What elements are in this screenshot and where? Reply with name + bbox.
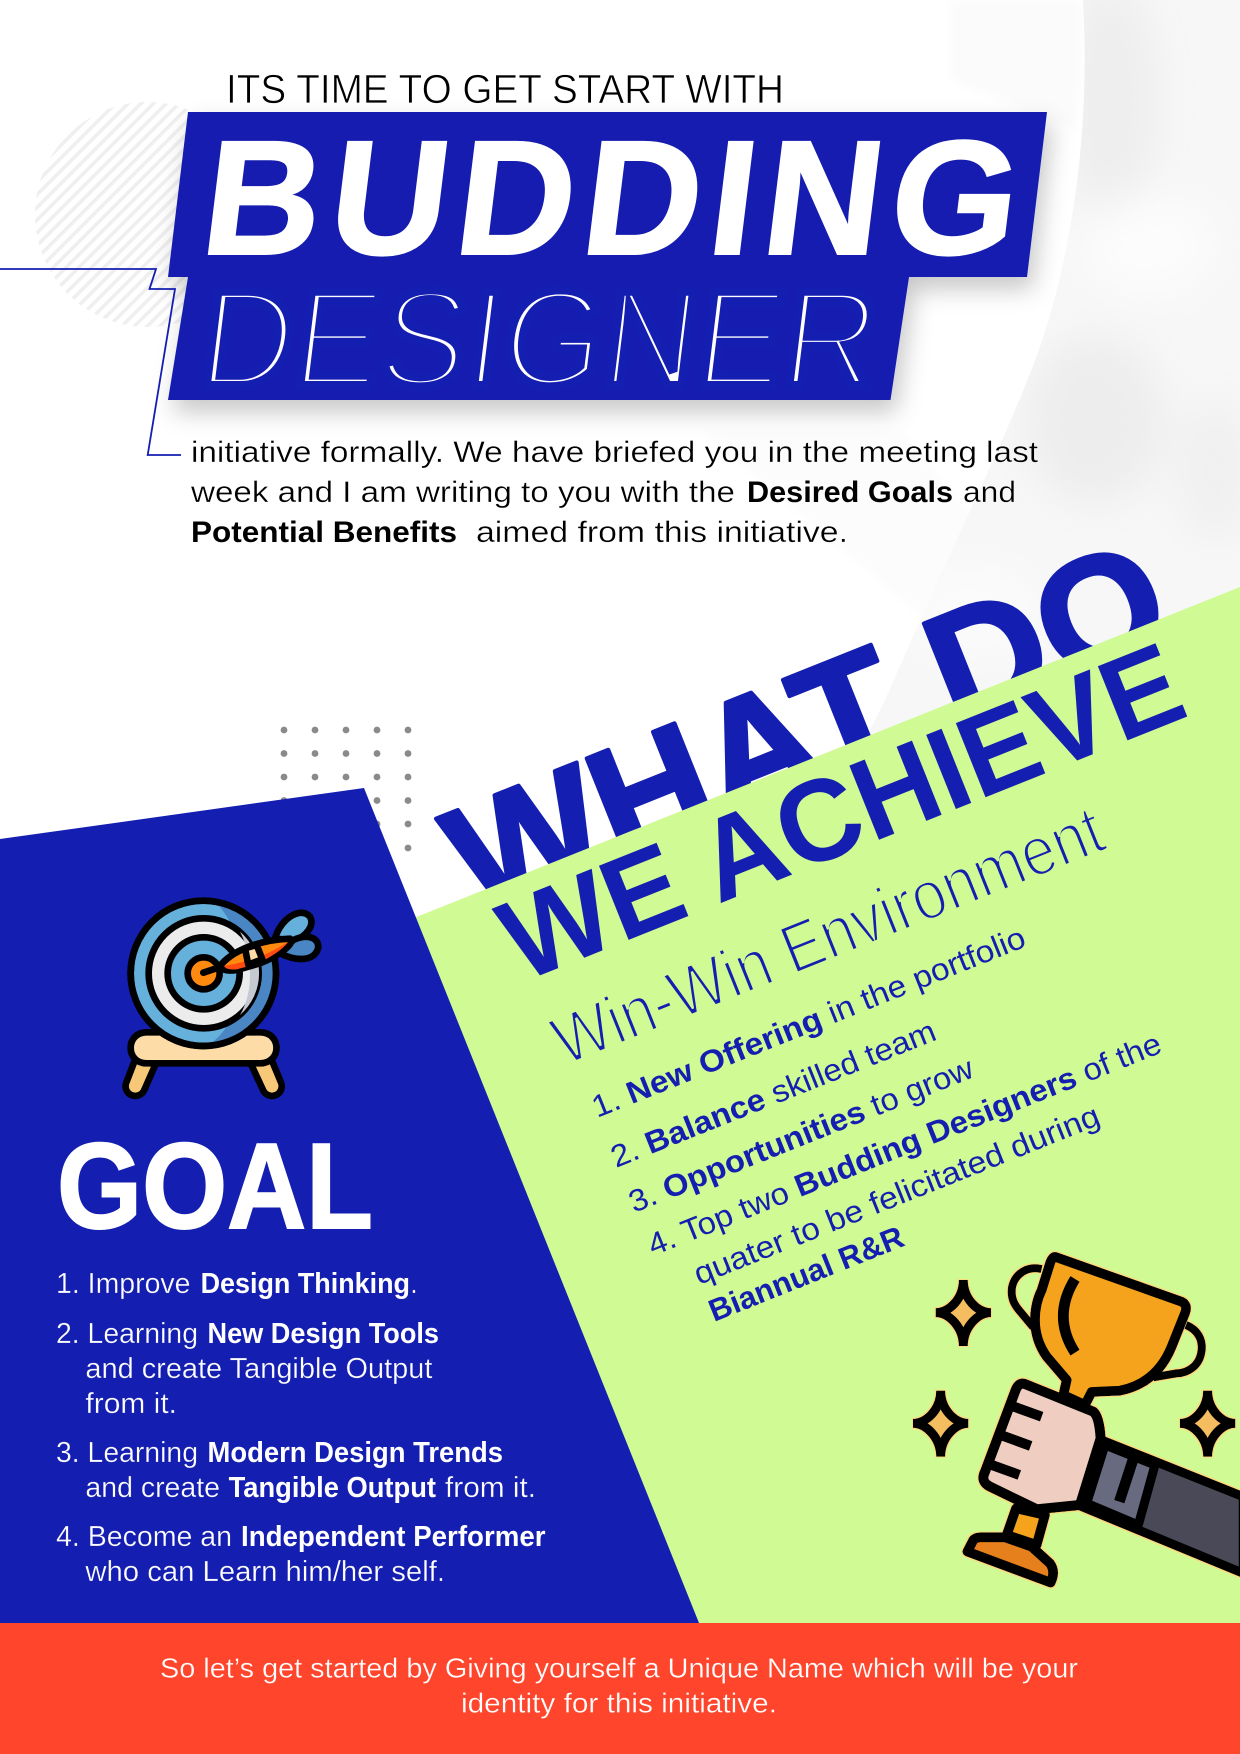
board: [131, 901, 276, 1046]
intro paragraph: Desired Goals: [747, 476, 953, 509]
icon: trophy in hand: [913, 1257, 1240, 1583]
intro paragraph: [190, 436, 1039, 549]
eyebrow heading: ITS TIME TO GET START WITH: [226, 66, 784, 112]
heading: what do: WHAT DO: [424, 507, 1191, 951]
goal list: from it.: [85, 1388, 177, 1420]
footer text: [160, 1652, 1078, 1718]
dart: [203, 913, 318, 973]
achieve list: 2. Balance skilled team: [606, 1013, 941, 1174]
connector line: [0, 269, 181, 455]
background facets: [894, 0, 1240, 700]
banner shape: [168, 112, 1047, 400]
panel: goal background: [0, 788, 699, 1623]
achieve list: [587, 920, 1166, 1328]
subheading: win-win environment: Win-Win Environment: [541, 791, 1114, 1080]
achieve list: quater to be felicitated during: [689, 1098, 1105, 1291]
title word: designer: DESIGNER: [192, 263, 887, 415]
intro paragraph: week and I am writing to you with the: [190, 476, 735, 509]
footer text: So let’s get started by Giving yourself a Unique Name which will be your: [160, 1652, 1078, 1684]
goal list: Modern Design Trends: [208, 1437, 503, 1469]
title banner: [168, 107, 1047, 415]
achieve list: 3. Opportunities to grow: [624, 1050, 979, 1219]
goal list: and create Tangible Output: [85, 1353, 432, 1385]
footer band: [0, 1623, 1240, 1754]
goal list: who can Learn him/her self.: [84, 1556, 445, 1588]
title word: budding: BUDDING: [194, 107, 1030, 289]
dot grid decoration: [281, 727, 411, 851]
stand bar: [131, 1032, 276, 1063]
sleeve: [1082, 1441, 1240, 1573]
goal heading: GOAL: [57, 1118, 373, 1254]
panel: achieve text: [482, 617, 1201, 1328]
intro paragraph: initiative formally. We have briefed you in the meeting last: [191, 436, 1039, 469]
goal list: Design Thinking: [201, 1268, 410, 1300]
heading: we achieve: WE ACHIEVE: [482, 617, 1201, 1006]
panel: achieve background: [412, 587, 1240, 1623]
intro paragraph: and: [963, 476, 1016, 509]
footer text: identity for this initiative.: [461, 1688, 777, 1718]
goal list: 2. Learning: [56, 1318, 198, 1350]
goal list: Tangible Output: [229, 1472, 436, 1504]
stand legs: [126, 1060, 282, 1096]
goal list: New Design Tools: [208, 1318, 439, 1350]
achieve list: Biannual R&R: [704, 1219, 909, 1328]
intro paragraph: aimed from this initiative.: [476, 516, 848, 549]
achieve list: 1. New Offering in the portfolio: [587, 920, 1030, 1124]
goal list: from it.: [445, 1472, 536, 1504]
goal list: .: [410, 1268, 418, 1300]
goal list: [56, 1268, 546, 1588]
icon: dartboard target: [126, 901, 318, 1096]
trophy cup: [1012, 1257, 1202, 1405]
achieve list: 4. Top two Budding Designers of the: [643, 1026, 1166, 1262]
goal list: 1. Improve: [56, 1268, 190, 1300]
goal list: and create: [85, 1472, 220, 1504]
goal list: 3. Learning: [56, 1437, 198, 1469]
intro paragraph: Potential Benefits: [191, 516, 457, 549]
goal list: 4. Become an: [56, 1521, 232, 1553]
sparkles: [913, 1280, 1235, 1457]
hatched circle decoration: [35, 102, 260, 327]
goal list: Independent Performer: [241, 1521, 546, 1553]
trophy base: [967, 1508, 1053, 1583]
hand: [983, 1384, 1101, 1509]
